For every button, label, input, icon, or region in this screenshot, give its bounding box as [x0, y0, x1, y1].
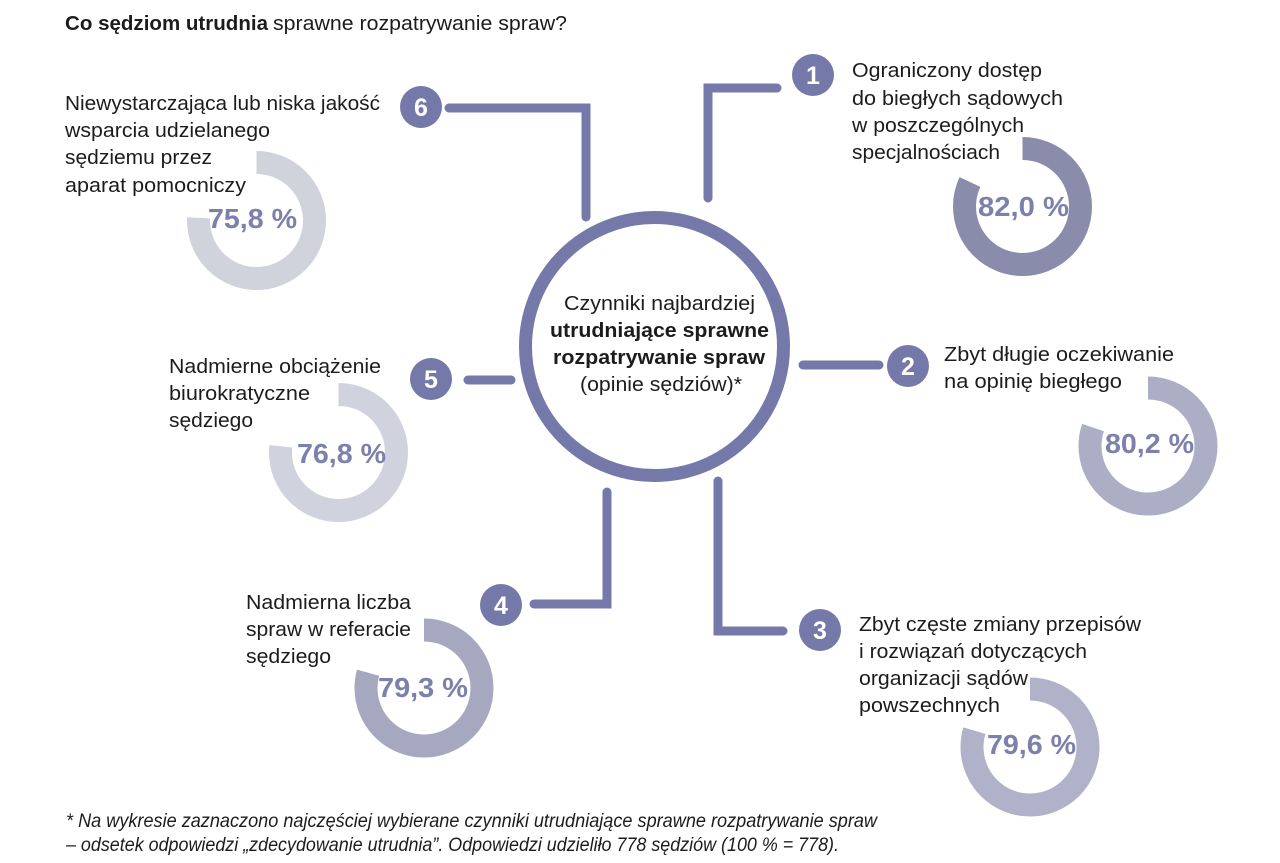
donut 75,8 % — [198, 162, 314, 278]
badge 4: 4 — [494, 592, 508, 620]
badge 6 — [400, 86, 442, 128]
label 2 — [944, 343, 1174, 393]
badge 2: 2 — [901, 353, 915, 381]
badge 1: 1 — [806, 62, 820, 90]
donut 79,3 % — [366, 630, 482, 746]
label 1: Ograniczony dostęp — [852, 59, 1042, 82]
label 3 — [859, 613, 1141, 717]
central circle: Czynniki najbardziej — [564, 292, 755, 315]
badge 2 — [887, 345, 929, 387]
label 4: spraw w referacie — [246, 618, 411, 641]
label 3: organizacji sądów — [859, 667, 1028, 690]
donut 82,0 % — [964, 148, 1080, 264]
label 5: Nadmierne obciążenie — [169, 355, 381, 378]
badge 3 — [799, 609, 841, 651]
label 5: biurokratyczne — [169, 382, 310, 405]
badge 4 — [480, 584, 522, 626]
footnote: * Na wykresie zaznaczono najczęściej wybierane czynniki utrudniające sprawne rozpatrywanie spraw — [66, 811, 878, 832]
footnote — [65, 811, 878, 856]
donut 76,8 %: 76,8 % — [297, 438, 386, 469]
label 6: wsparcia udzielanego — [64, 119, 270, 142]
title: sprawne rozpatrywanie spraw? — [273, 12, 567, 35]
label 5: sędziego — [169, 409, 253, 432]
donut 80,2 % — [1090, 388, 1206, 504]
label 1 — [851, 59, 1063, 164]
badge 5 — [410, 358, 452, 400]
donut 79,6 %: 79,6 % — [987, 729, 1076, 760]
title: Co sędziom utrudnia — [65, 12, 269, 35]
footnote: – odsetek odpowiedzi „zdecydowanie utrudnia”. Odpowiedzi udzieliło 778 sędziów (100 % = 778). — [65, 835, 839, 856]
central circle — [526, 218, 784, 476]
label 3: Zbyt częste zmiany przepisów — [859, 613, 1141, 636]
label 6 — [64, 92, 380, 197]
donut 75,8 %: 75,8 % — [208, 203, 297, 234]
factor 2 — [803, 343, 1206, 504]
badge 6: 6 — [414, 94, 428, 122]
donut 76,8 % — [280, 394, 396, 510]
label 5 — [169, 355, 381, 432]
central circle: utrudniające sprawne — [550, 319, 769, 342]
label 1: specjalnościach — [852, 141, 1000, 164]
label 3: powszechnych — [859, 694, 1000, 717]
badge 5: 5 — [424, 366, 438, 394]
central circle: rozpatrywanie spraw — [553, 346, 765, 369]
label 2: na opinię biegłego — [944, 370, 1122, 393]
factor 1 — [708, 54, 1080, 264]
label 6: Niewystarczająca lub niska jakość — [65, 92, 380, 115]
donut 79,3 %: 79,3 % — [378, 672, 468, 703]
donut 79,6 % — [972, 689, 1088, 805]
label 1: w poszczególnych — [851, 114, 1024, 137]
connector 5 — [468, 376, 511, 384]
label 3: i rozwiązań dotyczących — [859, 640, 1087, 663]
label 6: aparat pomocniczy — [65, 174, 247, 197]
badge 1 — [792, 54, 834, 96]
connector 4 — [534, 492, 607, 604]
central circle: (opinie sędziów)* — [580, 373, 742, 396]
connector 2 — [803, 360, 879, 370]
connector 1 — [708, 88, 777, 198]
label 6: sędziemu przez — [65, 146, 212, 169]
title — [65, 12, 567, 35]
label 4: Nadmierna liczba — [246, 591, 412, 614]
label 4 — [246, 591, 412, 668]
badge 3: 3 — [813, 617, 827, 645]
donut 82,0 %: 82,0 % — [978, 191, 1069, 222]
factor 4 — [246, 492, 607, 746]
factor 3 — [718, 481, 1141, 805]
donut 80,2 %: 80,2 % — [1105, 428, 1194, 459]
label 4: sędziego — [246, 645, 331, 668]
label 2: Zbyt długie oczekiwanie — [944, 343, 1174, 366]
connector 3 — [718, 481, 783, 631]
connector 6 — [449, 108, 586, 217]
factor 5 — [169, 355, 511, 510]
factor 6 — [64, 86, 586, 278]
label 1: do biegłych sądowych — [852, 87, 1063, 110]
